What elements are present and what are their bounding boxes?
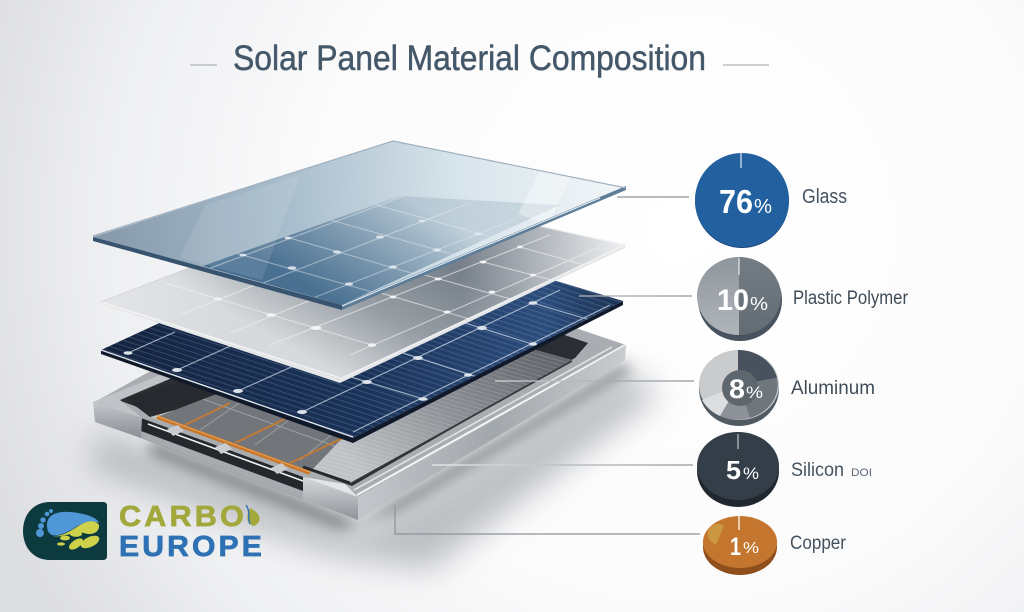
stat: aluminum 8%: Aluminum [791,378,875,399]
stat: aluminum 8%: % [746,383,763,402]
stat: plastic polymer 10%: Plastic Polymer [793,288,909,309]
aluminum frame layer [93,255,626,520]
exploded solar panel illustration [90,141,660,570]
stat: glass 76%: Glass [802,186,847,208]
silicon cell layer [101,280,623,443]
leader lines [395,197,700,534]
stat: plastic polymer 10% [697,257,909,341]
title: Solar Panel Material Composition [233,39,706,78]
stat: copper 1%: Copper [790,533,847,554]
stat: copper 1% [703,516,847,575]
stat: glass 76%: % [754,196,772,218]
frame shadow [90,362,660,570]
stat: copper 1%: % [743,540,759,557]
stat: plastic polymer 10%: % [750,294,768,314]
stat: glass 76% [695,153,847,248]
logo mark [23,502,107,560]
logo text: CARBO [119,501,247,533]
stat: silicon 5%: Silicon [791,460,844,481]
copper wiring [157,403,345,474]
stat: copper 1%: 1 [730,533,741,561]
logo: Carbo Europe [23,501,265,563]
stat: glass 76%: 76 [719,183,753,220]
stat: silicon 5%: 5 [726,455,741,485]
logo text europe: EUROPE [119,531,265,563]
stat: silicon 5%: % [743,464,759,483]
logo leaf [246,505,260,526]
stat: aluminum 8%: 8 [729,374,745,404]
stat: plastic polymer 10%: 10 [717,284,749,317]
stat: silicon 5% [697,432,872,507]
stat: silicon 5%: DOI [851,467,872,479]
stat: aluminum 8% [699,350,875,426]
glass layer [93,141,626,310]
plastic polymer layer [101,226,626,383]
